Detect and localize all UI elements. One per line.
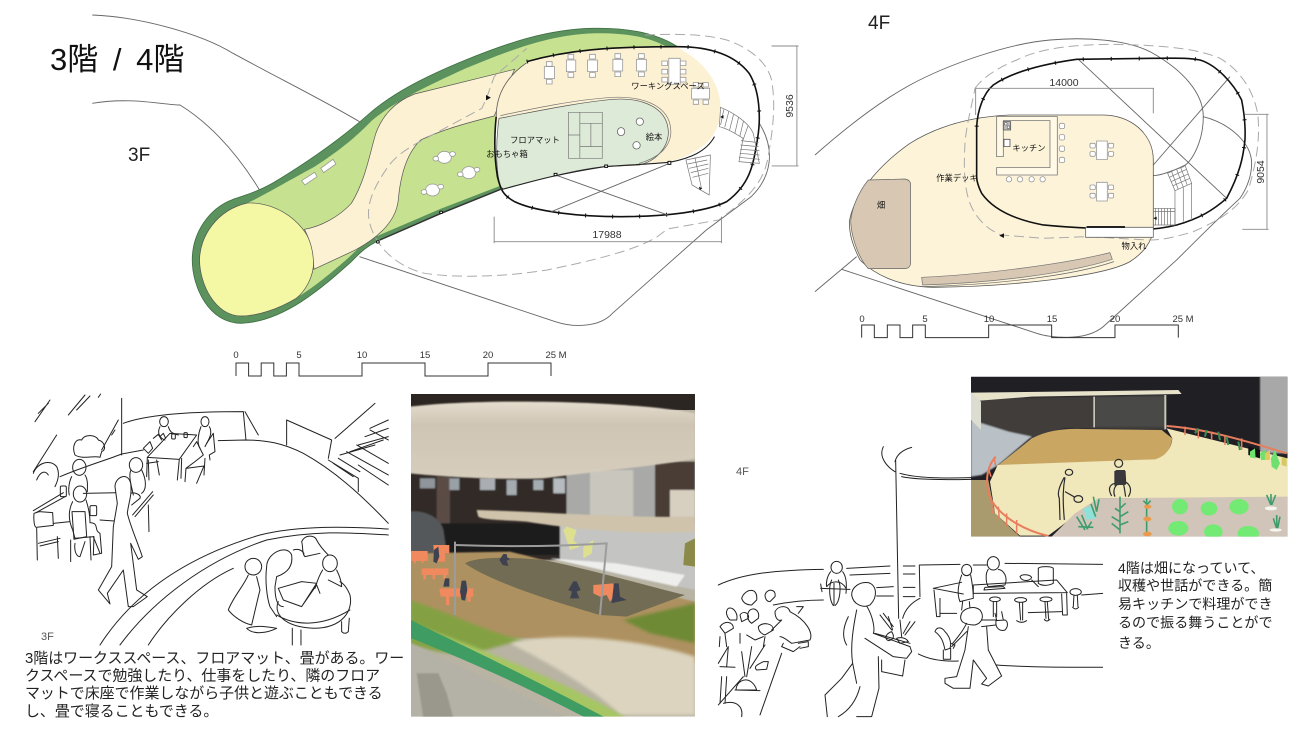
lower-left table and people <box>33 458 153 562</box>
description: 4F: るので振る舞うことがで <box>1118 614 1273 630</box>
model people <box>433 547 627 603</box>
lawn <box>410 600 527 654</box>
person at bicycle <box>821 561 850 606</box>
dashed roof outline <box>368 34 774 276</box>
curved balustrade <box>100 527 388 645</box>
slab <box>477 510 695 533</box>
plan labels: 4F <box>859 77 1267 325</box>
kitchen people <box>958 557 1006 610</box>
foliage <box>33 436 105 487</box>
scale bar: 3F: 0 <box>233 350 239 361</box>
path through terrace <box>304 69 515 269</box>
sketch: 4F interior <box>718 447 1103 717</box>
carrying figure <box>825 583 915 717</box>
stools <box>1006 123 1065 182</box>
deck floor <box>849 115 1153 287</box>
plan labels: 4F: 0 <box>859 314 865 325</box>
tatami <box>568 112 602 158</box>
stools <box>990 589 1081 622</box>
kitchen counter <box>997 117 1057 175</box>
stairs <box>686 107 760 195</box>
plant in background <box>563 527 593 558</box>
dark floor mat <box>465 558 685 617</box>
white mounds <box>1265 506 1282 532</box>
lower-left wood <box>971 480 1020 537</box>
photo: 4F model <box>971 373 1290 541</box>
dining tables <box>1090 141 1114 201</box>
working space floor <box>496 47 721 170</box>
glass <box>980 395 1165 438</box>
plan labels: 4F: 10 <box>984 314 994 325</box>
description: 4F: 収穫や世話ができる。簡 <box>1118 578 1272 594</box>
ceiling <box>410 402 695 479</box>
plan labels: 3F: 17988 <box>592 229 622 241</box>
terrace tables <box>421 151 480 196</box>
direction arrows <box>999 217 1157 238</box>
circular lawn end <box>200 203 314 316</box>
railing <box>987 426 1287 536</box>
upper table and people <box>143 417 215 483</box>
site outlines <box>92 15 769 325</box>
dimensions <box>494 46 799 243</box>
storage box <box>1086 227 1153 237</box>
crops <box>1077 494 1280 535</box>
left pale volume <box>971 420 1032 477</box>
plan labels: 4F: 作業デッキ <box>936 173 978 183</box>
model figure body <box>1115 470 1126 485</box>
top shadow <box>410 393 697 410</box>
stairs <box>1153 165 1192 225</box>
plan labels: 4F: 20 <box>1110 314 1120 325</box>
plan labels: 3F: 絵本 <box>646 132 663 142</box>
planter strip <box>922 253 1112 285</box>
scale bar: 3F: 20 <box>483 350 493 361</box>
description: 4F: 4階は畑になっていて、 <box>1118 560 1264 576</box>
room outline <box>977 58 1245 229</box>
plan labels: 4F: 物入れ <box>1122 241 1147 251</box>
scale bar: 3F: 25 M <box>545 350 567 361</box>
room ticks <box>977 58 1245 225</box>
farm plot <box>851 179 911 269</box>
description: 4F: きる。 <box>1118 635 1160 651</box>
dashed roof outline <box>964 44 1259 240</box>
scale bar: 3F: 15 <box>420 350 430 361</box>
site outlines <box>815 39 1252 337</box>
working tables <box>544 54 710 104</box>
dimensions <box>976 88 1269 229</box>
tan floor <box>997 429 1172 467</box>
brown floor <box>410 552 695 663</box>
right light strip <box>1260 373 1290 453</box>
round table group <box>228 536 351 645</box>
model columns <box>455 542 607 615</box>
scale bar: 4F <box>862 325 1178 338</box>
room outline <box>380 47 759 240</box>
cream deck <box>990 428 1288 536</box>
benches <box>302 159 336 185</box>
plan labels: 3F: おもちゃ箱 <box>486 149 528 159</box>
plan labels: 4F: 9054 <box>1255 160 1267 184</box>
plan labels: 3F: ワーキングスペース <box>631 81 705 91</box>
handwritten label: 4F: 4F <box>736 466 749 478</box>
plan labels: 4F: 畑 <box>877 200 885 210</box>
far plants <box>1195 428 1287 470</box>
description: 3F: クスペースで勉強したり、仕事をしたり、隣のフロア <box>25 668 380 684</box>
cabbages <box>1168 499 1259 541</box>
plan labels: 4F: 25 M <box>1172 314 1194 325</box>
floor plan: 3F <box>92 15 799 325</box>
plant bed <box>718 590 811 717</box>
scale bar: 3F: 10 <box>357 350 367 361</box>
floor mat circles <box>617 118 643 149</box>
scale bar: 3F <box>233 350 567 376</box>
floor plan: 4F <box>815 39 1269 338</box>
sketch: 3F interior <box>33 394 388 645</box>
room footprint <box>495 47 759 217</box>
background band <box>410 462 697 590</box>
orange furniture <box>411 545 615 605</box>
plan labels: 4F: 5 <box>922 314 928 325</box>
plan labels: 4F: キッチン <box>1012 143 1046 153</box>
plan labels: 3F: フロアマット <box>510 135 560 145</box>
terrace lawn <box>200 33 668 316</box>
column and floor lines <box>718 447 1103 715</box>
watering stream <box>1083 506 1097 520</box>
walking figure <box>98 477 147 607</box>
plan labels: 3F <box>486 81 796 241</box>
lower balcony <box>410 643 567 718</box>
title: 3階 / 4階 <box>50 42 184 77</box>
kitchen counter <box>933 567 1067 617</box>
scale bar: 3F: 5 <box>296 350 302 361</box>
cream path <box>510 637 695 715</box>
floor mat area <box>497 99 668 189</box>
site cross lines <box>551 163 670 215</box>
roof <box>971 390 1182 402</box>
walking figure with pot <box>935 608 1007 688</box>
heading: 4F: 4F <box>868 13 890 34</box>
carrots <box>1143 505 1152 536</box>
heading: 3F: 3F <box>128 145 150 166</box>
direction arrows <box>486 95 723 190</box>
column markers <box>376 161 671 243</box>
description: 3F: マットで床座で作業しながら子供と遊ぶこともできる <box>25 685 383 702</box>
photo: 3F model <box>410 393 697 718</box>
terrace outer band <box>192 28 679 323</box>
handwritten label: 3F: 3F <box>41 631 54 643</box>
model figures <box>1058 459 1131 520</box>
planting bed <box>1052 497 1288 537</box>
plan labels: 4F: 15 <box>1047 314 1057 325</box>
plan labels: 4F: 14000 <box>1049 77 1079 89</box>
bright lawn strip <box>430 629 626 717</box>
description: 4F: 易キッチンで料理ができ <box>1118 596 1273 612</box>
green railing <box>411 620 607 718</box>
windows and walls <box>33 394 388 523</box>
plan labels: 3F: 9536 <box>784 94 796 118</box>
description: 3F: 3階はワークススペース、フロアマット、畳がある。ワー <box>25 650 404 667</box>
description: 3F: し、畳で寝ることもできる。 <box>25 703 218 720</box>
